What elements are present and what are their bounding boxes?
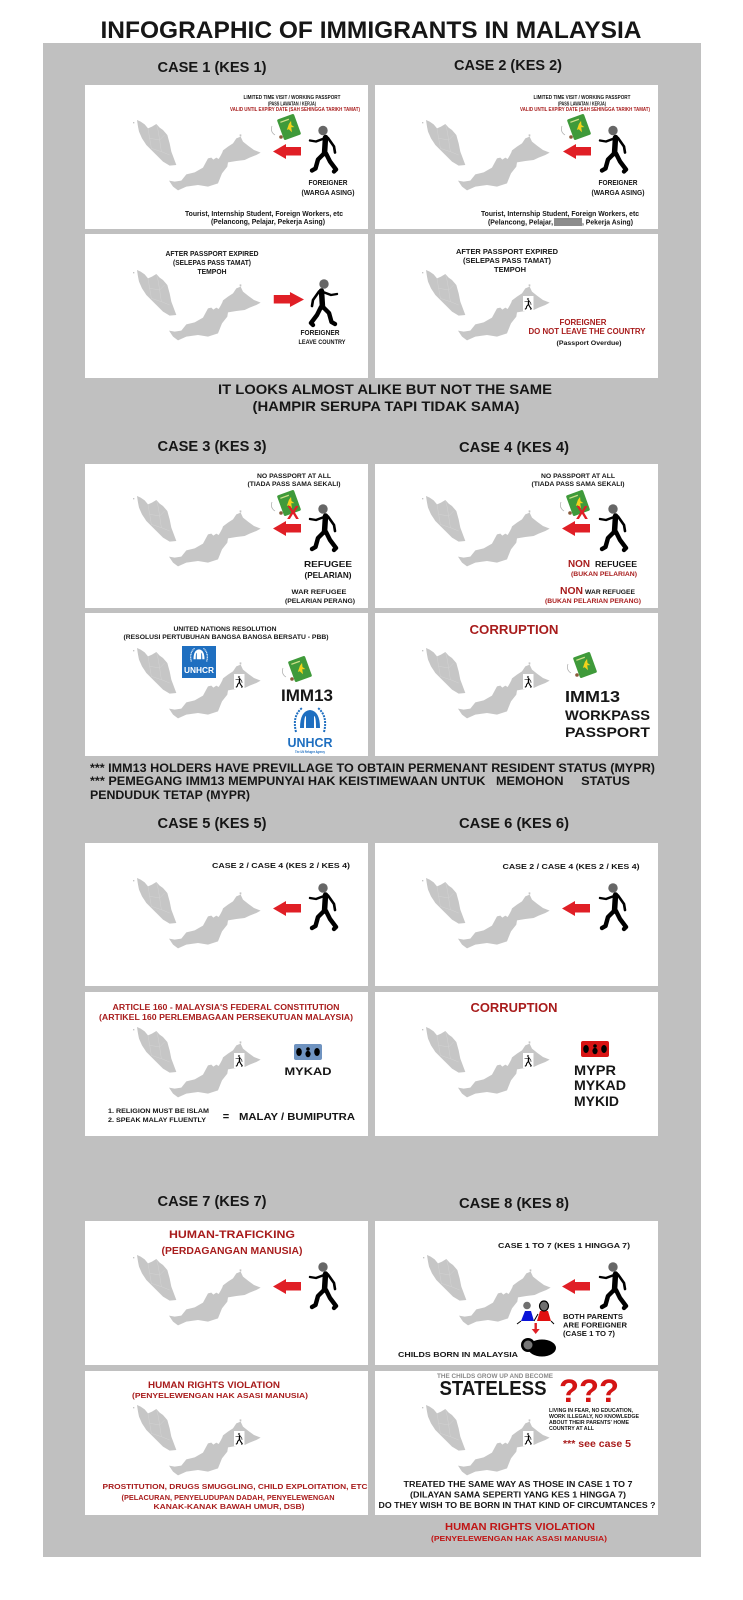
text: question marks: ??? [559, 1373, 619, 1409]
text: MyKad: MYKAD [284, 1066, 332, 1078]
icon: person inside Malaysia [523, 1431, 534, 1446]
panel: case 5 arrival [85, 843, 368, 986]
text: both parents: BOTH PARENTS [563, 1314, 623, 1321]
text: see cases: CASE 2 / CASE 4 (KES 2 / KES 4) [212, 863, 350, 870]
map: Malaysia [422, 120, 550, 190]
panel: case 7 rights violation [85, 1371, 368, 1515]
text: who [185, 209, 343, 226]
text: living in fear [549, 1408, 640, 1432]
arrow: entering [273, 1279, 301, 1294]
panel: case 3 refugee [85, 464, 368, 608]
text: passport note [520, 95, 650, 113]
text: almost alike: (HAMPIR SERUPA TAPI TIDAK SAMA) [252, 398, 520, 414]
text: bottom rights violation [431, 1522, 608, 1543]
text: bottom rights violation: (PENYELEWENGAN HAK ASASI MANUSIA) [431, 1534, 608, 1543]
text: living in fear: WORK ILLEGALY, NO KNOWLEDGE [549, 1414, 640, 1420]
panel: case 4 non refugee [375, 464, 658, 608]
text: rights violation: HUMAN RIGHTS VIOLATION [148, 1380, 280, 1390]
text: human trafficking [162, 1229, 302, 1257]
heading: case 6: CASE 6 (KES 6) [459, 816, 569, 832]
arrow: entering [562, 521, 590, 536]
text: documents: MYKID [574, 1093, 619, 1109]
text: refugee label: WAR REFUGEE [292, 589, 347, 596]
text: treated the same: (DILAYAN SAMA SEPERTI YANG KES 1 HINGGA 7) [410, 1490, 626, 1500]
text: non refugee label: REFUGEE [595, 560, 638, 569]
text: foreigner leaves: LEAVE COUNTRY [298, 340, 346, 346]
panel: case 8 stateless [375, 1371, 658, 1515]
arrow: leaving [274, 292, 304, 307]
text: non refugee label: (BUKAN PELARIAN PERANG) [545, 598, 641, 605]
heading: case 1: CASE 1 (KES 1) [158, 60, 267, 76]
text: exploitation [102, 1482, 368, 1511]
panel: case 3 UNHCR [85, 613, 368, 756]
icon: passport crossed [271, 490, 301, 523]
text: exploitation: KANAK-KANAK BAWAH UMUR, DSB) [154, 1504, 304, 1511]
text: non refugee label [545, 559, 641, 605]
text: UN resolution [124, 626, 328, 641]
text: who: (Pelancong, Pelajar, [488, 218, 553, 226]
icon: UNHCR logo [288, 708, 333, 754]
icon: passport [271, 114, 301, 140]
text: living in fear: COUNTRY AT ALL [549, 1426, 594, 1432]
arrow: parents to child [532, 1323, 540, 1334]
map: Malaysia [422, 496, 550, 566]
text: both parents: (CASE 1 TO 7) [563, 1331, 615, 1338]
map: Malaysia [422, 648, 550, 718]
icon: parents [517, 1301, 554, 1324]
map: Malaysia [133, 270, 261, 340]
text: no passport [532, 473, 624, 488]
text: passport note [230, 95, 360, 113]
text: who: , Pekerja Asing) [582, 218, 633, 226]
arrow: entering [562, 1279, 590, 1294]
text: passport note: VALID UNTIL EXPIRY DATE (SAH SEHINGGA TARIKH TAMAT) [520, 107, 650, 113]
icon: person inside Malaysia [234, 1431, 244, 1446]
text: foreigner leaves: FOREIGNER [300, 330, 340, 337]
panel: case 1 arrival [85, 85, 368, 229]
text: do not leave [528, 318, 646, 347]
icon: foreigner [600, 883, 626, 929]
text: treated the same [378, 1480, 656, 1510]
text: conditions: 1. RELIGION MUST BE ISLAM [108, 1108, 209, 1115]
text: corruption: CORRUPTION [470, 1001, 558, 1015]
text: conditions: 2. SPEAK MALAY FLUENTLY [108, 1117, 207, 1124]
text: see case 5: *** see case 5 [563, 1439, 631, 1450]
text: foreigner label: FOREIGNER [308, 180, 348, 187]
icon: foreigner leaving [311, 279, 337, 325]
map: Malaysia [422, 1405, 550, 1475]
text: UN resolution: (RESOLUSI PERTUBUHAN BANGSA BANGSA BERSATU - PBB) [124, 634, 328, 641]
map: Malaysia [133, 496, 261, 566]
text: almost alike: IT LOOKS ALMOST ALIKE BUT NOT THE SAME [218, 381, 552, 397]
text: see cases: CASE 2 / CASE 4 (KES 2 / KES 4) [502, 864, 640, 871]
text: documents: MYPR [574, 1062, 616, 1078]
arrow: entering [273, 521, 301, 536]
text: non refugee label: (BUKAN PELARIAN) [571, 571, 637, 578]
text: equals Malay / Bumiputra: = [223, 1111, 229, 1123]
map: Malaysia [133, 1405, 261, 1475]
icon: UNHCR logo: UNHCR [288, 735, 333, 750]
icon: person inside Malaysia [234, 1053, 244, 1068]
icon: person inside Malaysia [234, 674, 244, 689]
panel: case 7 trafficking [85, 1221, 368, 1365]
text: passport note: VALID UNTIL EXPIRY DATE (SAH SEHINGGA TARIKH TAMAT) [230, 107, 360, 113]
text: foreigner label [592, 180, 644, 197]
text: who: Tourist, Internship Student, Foreign Workers, etc [481, 209, 639, 218]
icon: foreigner [310, 126, 336, 172]
map: Malaysia [422, 1027, 550, 1097]
text: documents: MYKAD [574, 1077, 626, 1093]
icon: foreigner [600, 1262, 626, 1308]
icon: non refugee [600, 504, 626, 550]
panel: case 2 arrival [375, 85, 658, 229]
icon: passport crossed: X [576, 503, 588, 523]
text: almost alike [218, 381, 552, 414]
icon: foreigner [310, 883, 336, 929]
text: foreigner label: (WARGA ASING) [592, 190, 644, 197]
text: no passport: (TIADA PASS SAMA SEKALI) [248, 481, 340, 488]
icon: person inside Malaysia [523, 1053, 534, 1068]
text: documents: PASSPORT [565, 724, 650, 740]
panel: case 5 article 160 [85, 992, 368, 1136]
text: conditions [108, 1108, 209, 1124]
icon: UNHCR logo: The UN Refugee Agency [295, 749, 325, 754]
panel: case 1 after expiry [85, 234, 368, 378]
heading: case 5: CASE 5 (KES 5) [158, 816, 267, 832]
text: foreigner label [302, 180, 354, 197]
text: both parents: ARE FOREIGNER [563, 1322, 627, 1330]
text: IMM13 note: PENDUDUK TETAP (MYPR) [90, 790, 250, 802]
text: IMM13 note [90, 763, 655, 802]
text: childs born: CHILDS BORN IN MALAYSIA [398, 1350, 519, 1359]
text: exploitation: (PELACURAN, PENYELUDUPAN DADAH, PENYELEWENGAN [122, 1495, 334, 1502]
icon: UNHCR box: UNHCR [184, 666, 214, 675]
icon: MyKad card [294, 1044, 322, 1060]
text: no passport [248, 473, 340, 488]
text: after passport expired: (SELEPAS PASS TAMAT) [463, 256, 551, 265]
text: do not leave: (Passport Overdue) [556, 340, 622, 347]
arrow: entering [563, 144, 591, 159]
panel: case 6 arrival [375, 843, 658, 986]
map: Malaysia [423, 1255, 551, 1325]
text: documents: WORKPASS [565, 707, 650, 723]
text: both parents [563, 1314, 627, 1338]
text: non refugee label: NON [560, 586, 583, 597]
text: after passport expired: AFTER PASSPORT EXPIRED [166, 249, 259, 258]
text: foreigner label: FOREIGNER [598, 180, 638, 187]
arrow: entering [562, 901, 590, 916]
map: Malaysia [133, 1255, 261, 1325]
icon: person inside Malaysia [523, 674, 534, 689]
text: stateless: STATELESS [440, 1378, 546, 1400]
text: bottom rights violation: HUMAN RIGHTS VIOLATION [445, 1522, 595, 1533]
text: case 1 to 7: CASE 1 TO 7 (KES 1 HINGGA 7) [498, 1241, 631, 1250]
text: exploitation: PROSTITUTION, DRUGS SMUGGLING, CHILD EXPLOITATION, ETC [102, 1482, 368, 1491]
text: human trafficking: (PERDAGANGAN MANUSIA) [162, 1246, 302, 1257]
icon: foreigner [310, 1262, 336, 1308]
icon: refugee [310, 504, 336, 550]
text: non refugee label: WAR REFUGEE [585, 589, 636, 596]
text: equals Malay / Bumiputra: MALAY / BUMIPUTRA [239, 1111, 355, 1123]
text: after passport expired: TEMPOH [494, 265, 526, 274]
icon: passport [567, 652, 597, 678]
map: Malaysia [133, 878, 261, 948]
text: rights violation: (PENYELEWENGAN HAK ASASI MANUSIA) [132, 1391, 309, 1400]
text: UN resolution: UNITED NATIONS RESOLUTION [174, 626, 277, 633]
text: refugee label: (PELARIAN PERANG) [285, 598, 355, 605]
map: Malaysia [133, 648, 261, 718]
text: article 160 [99, 1003, 353, 1022]
text: foreigner leaves [298, 330, 346, 346]
icon: passport [561, 114, 591, 140]
text: no passport: NO PASSPORT AT ALL [257, 473, 331, 480]
icon: baby [521, 1338, 556, 1356]
heading: case 4: CASE 4 (KES 4) [459, 440, 569, 456]
text: rights violation [132, 1380, 309, 1400]
map: Malaysia [422, 878, 550, 948]
arrow: entering [273, 901, 301, 916]
icon: red card [581, 1041, 609, 1057]
text: grow up: THE CHILDS GROW UP AND BECOME [437, 1374, 553, 1380]
text: after passport expired [456, 247, 559, 274]
panel: case 6 corruption [375, 992, 658, 1136]
text: no passport: (TIADA PASS SAMA SEKALI) [532, 481, 624, 488]
heading: case 3: CASE 3 (KES 3) [158, 439, 267, 455]
text: living in fear: LIVING IN FEAR, NO EDUCATION, [549, 1408, 634, 1414]
text: living in fear: ABOUT THEIR PARENTS' HOME [549, 1420, 630, 1426]
text: documents [565, 689, 650, 740]
map: Malaysia [133, 120, 261, 190]
heading: case 8: CASE 8 (KES 8) [459, 1196, 569, 1212]
text: refugee label: (PELARIAN) [304, 570, 352, 580]
text: after passport expired: TEMPOH [198, 267, 226, 276]
text: treated the same: DO THEY WISH TO BE BORN IN THAT KIND OF CIRCUMTANCES ? [378, 1501, 656, 1510]
panel: case 2 overstay [375, 234, 658, 378]
text: refugee label: REFUGEE [304, 559, 352, 569]
text: passport note: LIMITED TIME VISIT / WORKING PASSPORT [534, 95, 631, 101]
icon: passport crossed: X [287, 503, 299, 523]
text: after passport expired: AFTER PASSPORT EXPIRED [456, 247, 559, 256]
text: human trafficking: HUMAN-TRAFICKING [169, 1229, 295, 1241]
text: do not leave: FOREIGNER [560, 318, 607, 327]
text: IMM13: IMM13 [281, 686, 333, 705]
text: corruption: CORRUPTION [470, 623, 558, 637]
panel: case 8 parents [375, 1221, 658, 1365]
text: who [481, 209, 639, 226]
icon: passport crossed [560, 490, 590, 523]
icon: person inside Malaysia [523, 296, 534, 311]
text: article 160: ARTICLE 160 - MALAYSIA'S FEDERAL CONSTITUTION [112, 1003, 340, 1012]
text: IMM13 note: *** IMM13 HOLDERS HAVE PREVILLAGE TO OBTAIN PERMENANT RESIDENT STATUS (MYPR) [90, 763, 655, 775]
icon: UNHCR box [182, 646, 216, 678]
text: who: (Pelancong, Pelajar, Pekerja Asing) [211, 217, 325, 226]
text: no passport: NO PASSPORT AT ALL [541, 473, 615, 480]
heading: case 2: CASE 2 (KES 2) [454, 58, 562, 74]
text: do not leave: DO NOT LEAVE THE COUNTRY [528, 327, 646, 336]
text: treated the same: TREATED THE SAME WAY AS THOSE IN CASE 1 TO 7 [404, 1480, 633, 1489]
text: IMM13 note: *** PEMEGANG IMM13 MEMPUNYAI HAK KEISTIMEWAAN UNTUK MEMOHON STATUS [90, 776, 630, 788]
text: after passport expired [166, 249, 259, 276]
text: passport note: LIMITED TIME VISIT / WORKING PASSPORT [244, 95, 341, 101]
text: passport note: (PASS LAWATAN / KERJA) [268, 102, 316, 108]
heading: case 7: CASE 7 (KES 7) [158, 1194, 267, 1210]
arrow: entering [273, 144, 301, 159]
panel: case 4 corruption [375, 613, 658, 756]
text: article 160: (ARTIKEL 160 PERLEMBAGAAN PERSEKUTUAN MALAYSIA) [99, 1013, 353, 1022]
text: documents [574, 1062, 626, 1109]
title: INFOGRAPHIC OF IMMIGRANTS IN MALAYSIA [100, 17, 642, 44]
text: who: Tourist, Internship Student, Foreign Workers, etc [185, 209, 343, 218]
icon: foreigner [600, 126, 626, 172]
map: Malaysia [133, 1027, 261, 1097]
text: non refugee label: NON [568, 559, 590, 570]
text: documents: IMM13 [565, 689, 620, 706]
text: after passport expired: (SELEPAS PASS TAMAT) [173, 258, 251, 267]
text: passport note: (PASS LAWATAN / KERJA) [558, 102, 606, 108]
text: refugee label [285, 559, 355, 605]
text: foreigner label: (WARGA ASING) [302, 190, 354, 197]
icon: IMM13 passport [282, 656, 312, 682]
map: Malaysia [422, 270, 550, 340]
